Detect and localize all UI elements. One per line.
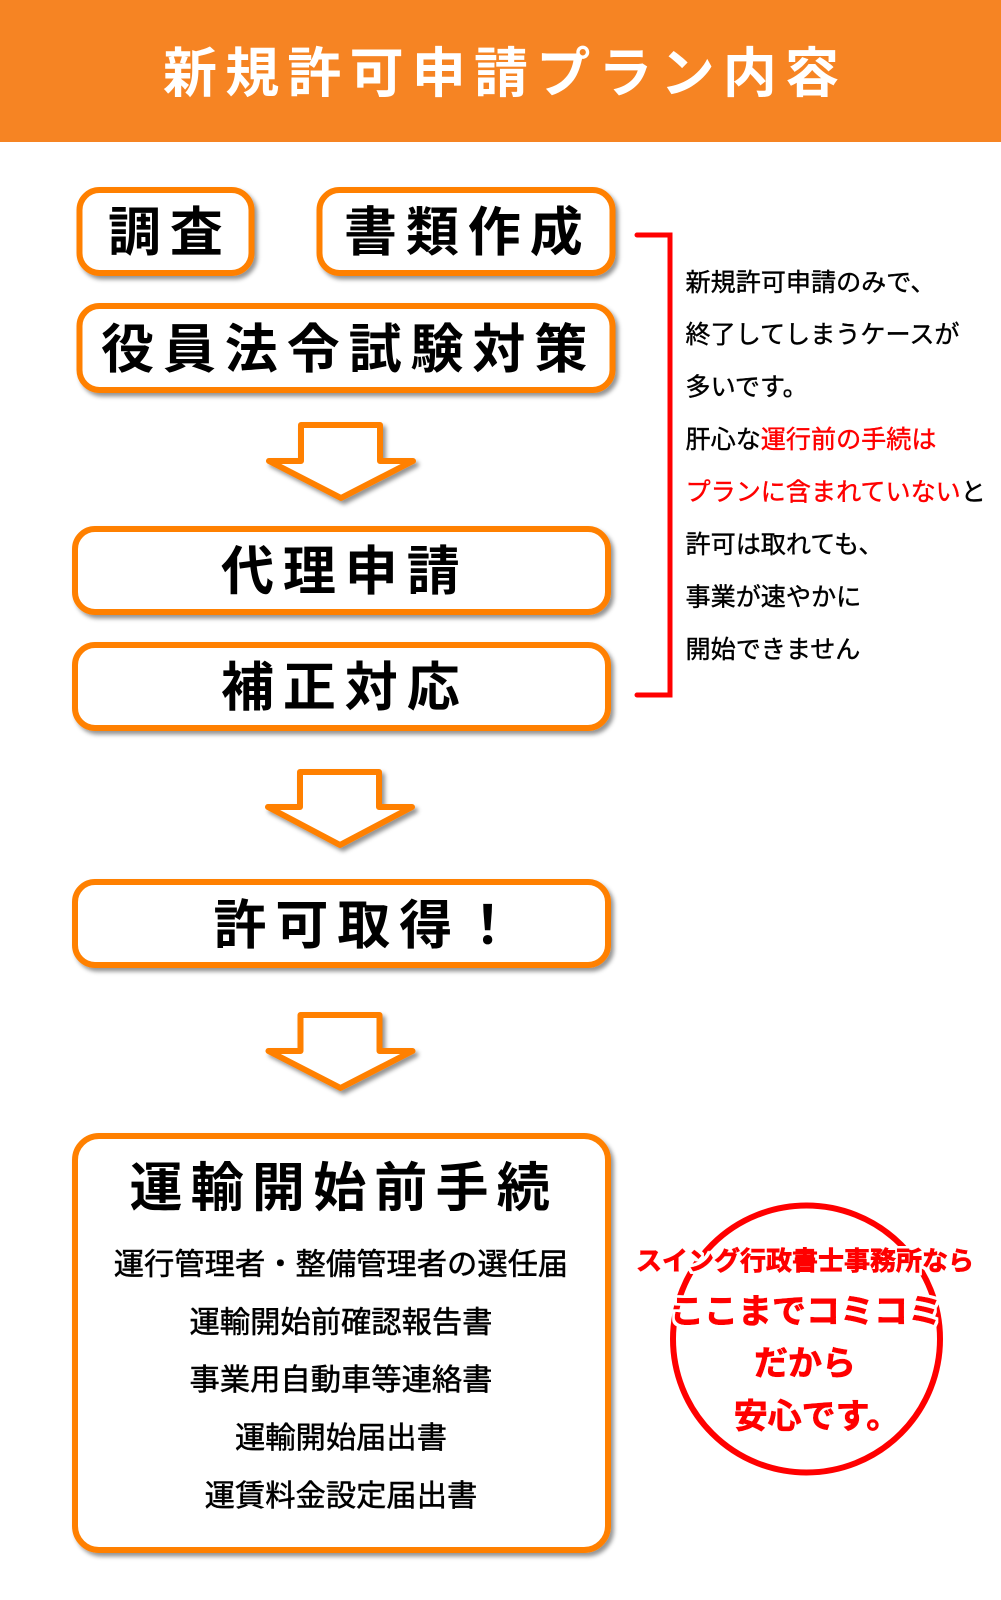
step: 代理申請 [75,529,608,612]
document list: 事業用自動車等連絡書 [190,1363,492,1397]
arrow 3 [268,1015,412,1088]
side note: 事業が速やかに [686,584,861,612]
step: 調査: 調査 [108,204,232,262]
header banner [0,0,1001,142]
callout text: だから [754,1345,856,1383]
side note: 終了してしまうケースが [686,321,960,349]
callout text: 安心です。 [734,1398,900,1436]
side note: 多いです。 [686,374,808,402]
step: 代理申請: 代理申請 [221,542,469,602]
step: 役員法令試験対策: 役員法令試験対策 [101,320,596,380]
step: 補正対応 [75,645,608,728]
side note: 新規許可申請のみで、 [686,269,935,297]
side note: プランに含まれていないと [686,478,986,506]
arrow 1 [269,425,413,498]
side note: 肝心な運行前の手続は [686,426,936,454]
document list: 運行管理者・整備管理者の選任届 [114,1248,568,1282]
document list [114,1248,568,1513]
step: 書類作成 [320,190,612,273]
red bracket [637,235,670,695]
side note: 許可は取れても、 [686,531,884,559]
step: 役員法令試験対策 [80,306,612,390]
arrow 2 [268,772,412,845]
step: 許可取得！: 許可取得！ [214,896,523,956]
callout text: スイング行政書士事務所なら [636,1246,974,1276]
side note: 開始できません [686,636,860,664]
document list: 運賃料金設定届出書 [205,1479,477,1513]
step: 補正対応: 補正対応 [221,658,469,718]
callout: red circle [636,1206,974,1472]
title: 新規許可申請プラン内容 [163,44,847,104]
panel heading: 運輸開始前手続 [130,1159,558,1218]
step: 許可取得！ [75,882,608,965]
callout text: ここまでコミコミ [670,1293,942,1331]
side note [686,269,986,664]
document list: 運輸開始届出書 [235,1421,447,1455]
step: 調査 [80,190,252,273]
document list: 運輸開始前確認報告書 [190,1306,492,1340]
callout text [636,1246,974,1436]
step: 書類作成: 書類作成 [344,204,592,262]
panel: 運輸開始前手続 [75,1136,608,1550]
